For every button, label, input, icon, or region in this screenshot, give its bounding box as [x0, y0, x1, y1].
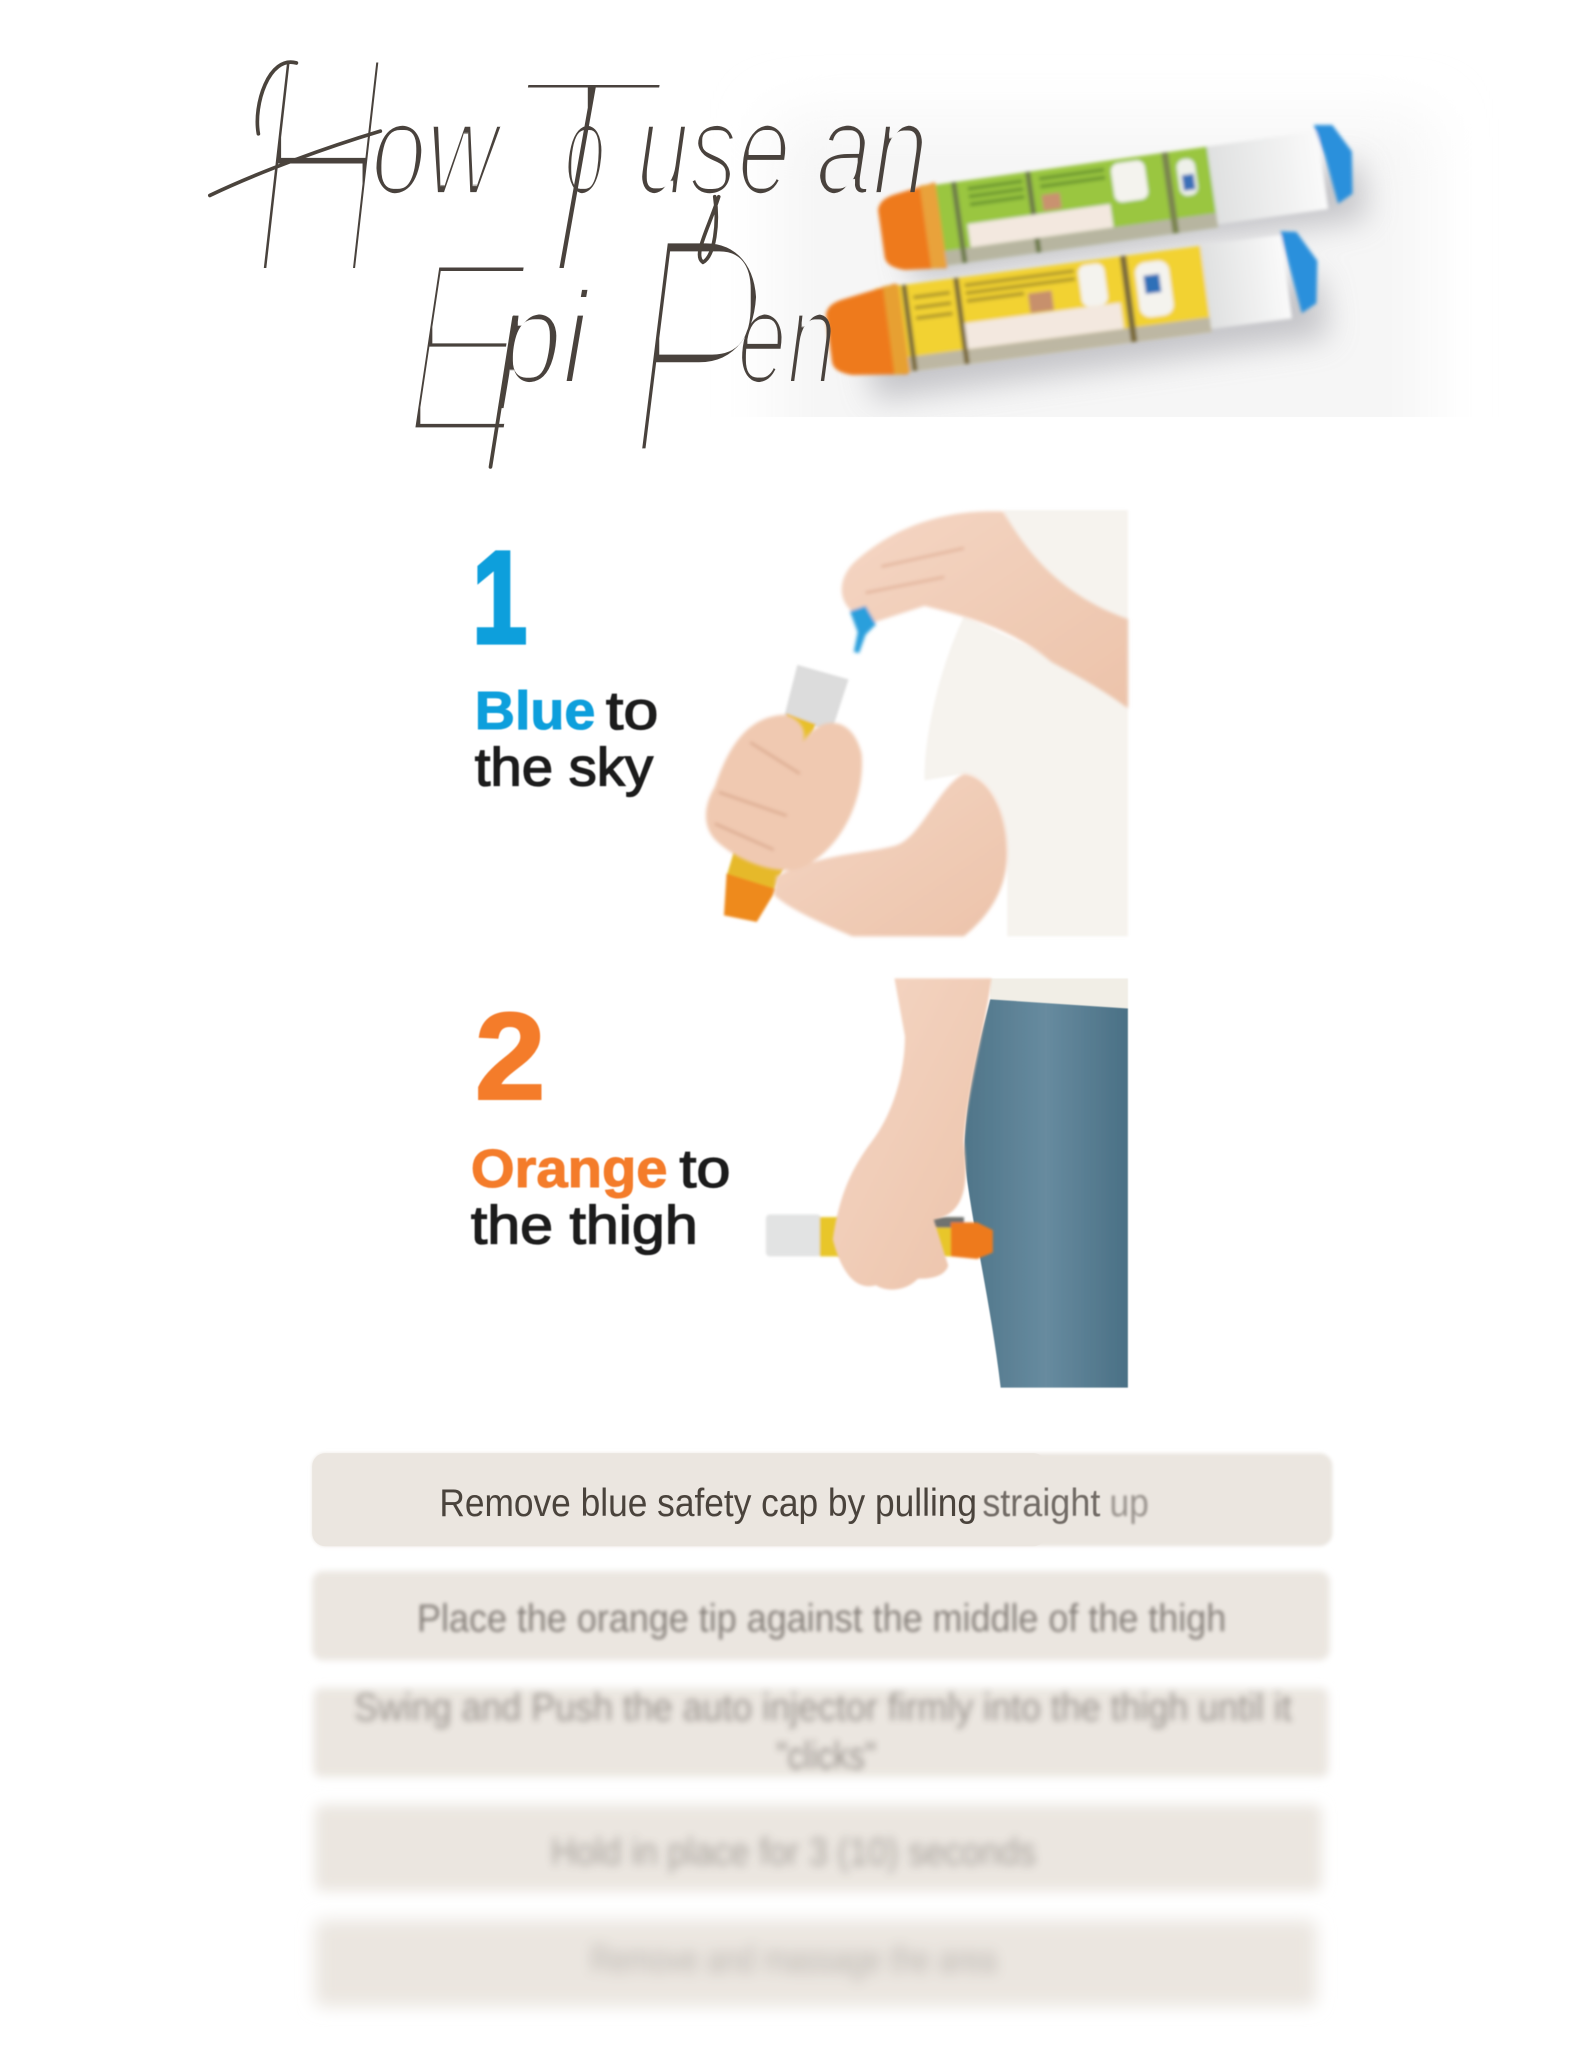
panel: instruction 2 — [312, 1571, 1330, 1660]
illustration: shirt hem — [990, 978, 1128, 1010]
instruction 3 text: Swing and Push the auto injector firmly into the thigh until it — [354, 1686, 1292, 1730]
step 2 label — [471, 1139, 731, 1255]
title: E — [400, 204, 533, 490]
step 1 label: to — [606, 681, 658, 741]
step 2 label: Orange — [471, 1139, 668, 1199]
illustration: arm and hand — [833, 978, 991, 1290]
icon: yellow auto-injector — [823, 227, 1325, 384]
instruction 1 text: Remove blue safety cap by pulling — [439, 1481, 977, 1525]
step 2 number: 2 — [475, 988, 546, 1126]
illustration: jeans — [964, 999, 1128, 1388]
title: pi — [495, 264, 591, 411]
instruction 1 text: up — [1110, 1481, 1149, 1525]
title: P — [627, 166, 766, 525]
instruction 4 text: Hold in place for 3 (10) seconds — [551, 1830, 1036, 1874]
instruction 3 text — [354, 1686, 1292, 1778]
instruction 5 text: Remove and massage the area — [590, 1937, 997, 1981]
illustration: torso and shirt — [925, 510, 1128, 936]
illustration: fist and forearm — [706, 715, 1007, 936]
title: o — [564, 75, 606, 222]
panel: instruction 4 — [315, 1805, 1322, 1891]
panel: instruction 1 — [312, 1453, 1332, 1546]
step 1 number: 1 — [472, 524, 527, 671]
title: ow — [371, 75, 504, 222]
pen shadows — [866, 162, 1368, 401]
step 1 label: the sky — [475, 738, 653, 798]
instruction 3 text: "clicks" — [776, 1734, 876, 1778]
title — [210, 0, 929, 525]
step 2 label: the thigh — [471, 1195, 698, 1255]
illustration: raised hand holding blue cap — [842, 511, 1128, 708]
illustration: auto-injector — [766, 1214, 993, 1259]
step 1 label — [475, 681, 658, 798]
icon: green auto-injector — [875, 120, 1360, 276]
illustration: auto-injector held in fist — [724, 665, 849, 922]
title: en — [737, 264, 837, 411]
step 2 label: to — [679, 1139, 731, 1199]
panel: instruction 5 — [315, 1920, 1317, 2007]
title: an — [816, 75, 929, 222]
instruction 2 text: Place the orange tip against the middle of the thigh — [417, 1597, 1226, 1641]
panel: instruction 3 — [313, 1686, 1329, 1778]
step 1 label: Blue — [475, 681, 595, 741]
panel: step 2 photo — [471, 978, 1128, 1388]
panel: step 1 photo — [472, 510, 1128, 936]
instruction 1 text: straight — [982, 1481, 1100, 1525]
panel: header photo of two auto-injectors — [811, 121, 1399, 417]
title: T — [492, 11, 672, 341]
title: use — [636, 75, 791, 222]
